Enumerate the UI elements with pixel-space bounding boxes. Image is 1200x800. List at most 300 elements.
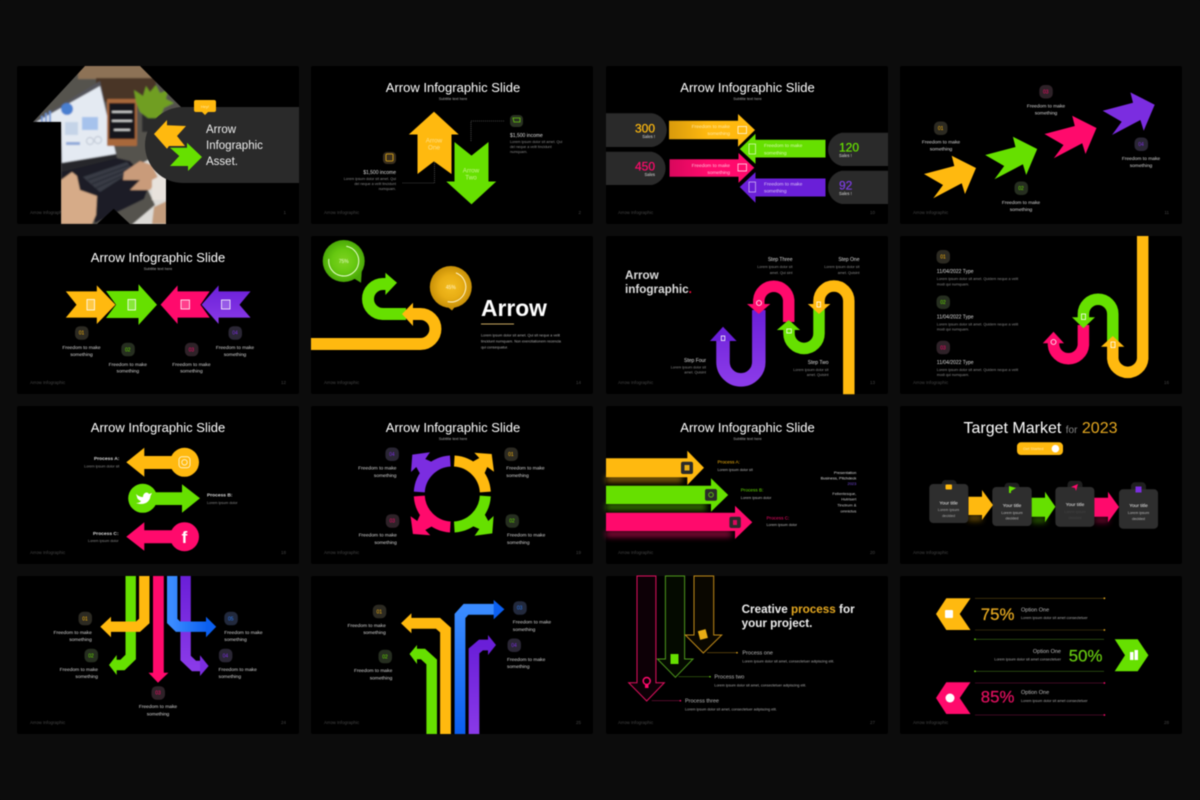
icons (643, 629, 708, 688)
panel: slide 13 branching arrows down (30, 576, 286, 725)
arrow captions: something (764, 188, 787, 194)
yellow percent bubble (430, 266, 472, 310)
footer: Arrow Infographic (913, 380, 949, 385)
step 05: 05 (228, 616, 234, 622)
footer label: Arrow Infographic (30, 210, 66, 215)
heading: Arrow (625, 269, 660, 282)
cover title: Infographic (206, 140, 263, 152)
card 3: decided (1069, 516, 1081, 520)
arrow labels: Arrow (426, 138, 443, 144)
step 05 (224, 612, 263, 643)
step 04: Freedom to make (507, 657, 546, 663)
step 02: Freedom to make (109, 362, 147, 368)
icons (738, 126, 756, 192)
step two (793, 360, 829, 377)
step 03: Freedom to make (139, 704, 177, 710)
85 percent (981, 688, 1088, 707)
right pills (828, 133, 888, 204)
side text: Tinctrum & (837, 502, 857, 508)
process B label: Lorem ipsum dolor (207, 501, 238, 505)
card 2 (992, 483, 1032, 526)
arrow captions: something (707, 170, 730, 176)
step 02: something (370, 676, 393, 682)
step 01: Freedom to make (347, 623, 386, 629)
subtitle: Subtitle text here (439, 97, 467, 101)
panel: slide 6 curved arrows (311, 240, 581, 385)
step 03: something (374, 540, 397, 546)
heading: Arrow Infographic Slide (680, 80, 815, 95)
75 percent: Option One (1021, 608, 1049, 614)
step 03: something (513, 627, 536, 633)
arrow captions: something (764, 150, 787, 156)
step 01: Freedom to make (53, 630, 92, 636)
panel: slide 4 rising arrows (913, 85, 1169, 215)
item 01 (936, 250, 1018, 286)
arrow labels: Arrow (463, 168, 480, 174)
sales labels (642, 134, 852, 196)
income text right: numquam. (510, 150, 527, 154)
step 04: 04 (389, 452, 395, 458)
footer: Arrow Infographic (913, 210, 949, 215)
step 04 (507, 638, 546, 670)
heading: infographic. (625, 283, 692, 296)
step 03: 03 (517, 606, 523, 612)
sales labels: Sales ! (839, 153, 852, 158)
step 02: something (75, 674, 98, 680)
process one (742, 651, 834, 663)
icon: green arrow (170, 143, 202, 171)
card 2: decided (1006, 516, 1018, 520)
step 04: 04 (1138, 142, 1144, 148)
icons (87, 300, 230, 310)
step 02: something (507, 540, 530, 546)
yellow arrow (968, 490, 993, 520)
icon: cart (510, 115, 523, 127)
card 4 (1119, 482, 1158, 529)
panel: slide 3 sales arrows (606, 80, 888, 215)
step one: Lorem ipsum dolor sit (824, 265, 860, 269)
pink arrow (1094, 492, 1119, 522)
arrow labels (426, 138, 480, 182)
item 03 (936, 341, 1018, 377)
card 1: decided (942, 514, 955, 518)
connectors (652, 652, 738, 702)
step four (671, 358, 706, 374)
yellow path (819, 286, 849, 394)
item 03: Lorem ipsum dolor sit amet. Quidem neque a velit (937, 368, 1018, 372)
purple path (710, 310, 759, 380)
green arrow (410, 645, 432, 734)
step 04 (358, 448, 399, 479)
sales labels: Sales ! (839, 191, 852, 196)
arrow captions: Freedom to make (692, 163, 730, 169)
process C label (88, 531, 119, 543)
icon boxes (681, 462, 741, 528)
yellow arrow (669, 114, 755, 147)
step 03: something (180, 368, 203, 374)
item 02: 02 (940, 300, 946, 306)
income text left: $1,500 income (363, 170, 396, 176)
instagram arrow (126, 448, 199, 477)
item 02: Lorem ipsum dolor sit amet. Quidem neque a velit (937, 322, 1018, 326)
process two (714, 675, 806, 687)
arrow labels: One (428, 144, 440, 152)
step three: Step Three (768, 257, 793, 263)
step 03: Freedom to make (1027, 104, 1065, 110)
yellow curved arrow (311, 303, 435, 344)
page number: 10 (870, 210, 875, 215)
purple arrow (474, 635, 496, 734)
step 03 (359, 514, 399, 546)
step 01: something (70, 352, 93, 358)
page number: 19 (576, 550, 581, 555)
step four: amet. Quisint (684, 370, 706, 374)
process A: Lorem ipsum dolor sit (718, 468, 753, 472)
footer: Arrow Infographic (324, 720, 360, 725)
item 03: 11/04/2022 Type (937, 360, 974, 366)
green quadrant (454, 496, 494, 536)
figures (635, 122, 859, 192)
arrow captions: Freedom to make (692, 124, 730, 130)
yellow percent bubble: 45% (446, 285, 456, 291)
arrow captions (692, 124, 803, 194)
step 04: something (224, 352, 247, 358)
yellow arrow (606, 451, 704, 485)
process two: Process two (714, 675, 744, 681)
heading: Arrow Infographic Slide (680, 420, 815, 435)
icon: yellow arrow (154, 120, 186, 149)
85 percent: 85% (981, 688, 1014, 707)
facebook arrow (126, 522, 199, 551)
card 4: Lorem ipsum (1128, 511, 1149, 515)
footer: Arrow Infographic (618, 210, 654, 215)
side text: Presentation (834, 470, 856, 475)
income text left: numquam. (379, 187, 396, 191)
step 04: something (218, 674, 241, 680)
step 03: 03 (390, 519, 395, 525)
yellow path (1101, 236, 1143, 372)
page number: 25 (576, 720, 581, 725)
step 03: 03 (1043, 90, 1049, 96)
subtitle: Subtitle text here (733, 437, 762, 441)
50 percent: 50% (1069, 647, 1102, 666)
arrow one (408, 111, 460, 175)
income text right: Lorem ipsum dolor sit amet. Qui (510, 140, 562, 144)
card 1: Your title (939, 500, 958, 506)
footer: Arrow Infographic (618, 380, 654, 385)
step 01 (504, 448, 545, 479)
step 02: 02 (88, 653, 94, 659)
page number: 13 (870, 380, 875, 385)
process A: Process A: (718, 460, 740, 464)
cover title (206, 124, 263, 168)
purple arrow (739, 171, 826, 204)
step 02: Freedom to make (507, 532, 546, 538)
twitter arrow (128, 484, 200, 513)
step 02: 02 (382, 654, 388, 660)
page number: 12 (281, 380, 286, 385)
green arrow (606, 478, 728, 512)
item 03: 03 (940, 345, 946, 351)
process B label (207, 492, 238, 505)
figures: 300 (635, 122, 655, 136)
pink path (1043, 325, 1083, 359)
step four: Lorem ipsum dolor sit (671, 366, 706, 370)
button (1017, 442, 1063, 455)
hey bubble (194, 100, 216, 115)
panel: slide 8 winding arrow list (913, 236, 1169, 385)
card 3 (1055, 481, 1094, 527)
green arrowhead (777, 320, 800, 330)
step three (757, 257, 793, 275)
figures: 120 (839, 140, 859, 154)
pink arrow (160, 284, 210, 325)
panel: slide 12 target market (913, 420, 1158, 555)
purple arrow (1103, 92, 1155, 135)
yellow branch (100, 576, 144, 637)
sales labels: Sales ! (642, 134, 655, 139)
green arrow (739, 133, 826, 165)
icons (721, 300, 820, 340)
pink banner (936, 682, 970, 714)
step 01: Freedom to make (922, 140, 960, 146)
yellow arrow (401, 613, 446, 734)
step 02: 02 (1018, 186, 1024, 192)
dashed connectors (402, 121, 504, 183)
green arrow (1032, 492, 1055, 522)
process A label (84, 456, 120, 468)
step 02 (506, 514, 546, 546)
page number: 28 (1164, 720, 1169, 725)
panel: slide 1 cover (28, 60, 299, 230)
50 percent: Lorem ipsum dolor sit amet consectetuer (994, 658, 1062, 662)
side text: Fellentesque, (832, 491, 856, 496)
footer: Arrow Infographic (324, 210, 360, 215)
income text right: del neque a velit tincidunt (510, 145, 552, 149)
step 02: Freedom to make (354, 668, 393, 674)
green branch (109, 576, 131, 675)
side text: 2023 (847, 481, 857, 486)
process C: Lorem ipsum dolor (766, 523, 798, 527)
page number: 18 (281, 550, 286, 555)
purple branch (186, 576, 209, 676)
process B: Lorem ipsum dolor (741, 496, 772, 500)
process A (718, 460, 753, 472)
process C: Process C: (766, 516, 789, 520)
sales labels: Sales (645, 172, 655, 177)
green curved arrow (368, 273, 406, 314)
process three: Process three (685, 699, 719, 705)
body text (481, 334, 562, 350)
lines (975, 598, 1104, 715)
heading: Creative process for (742, 603, 855, 616)
green outline arrow (657, 576, 693, 677)
step 01: 01 (938, 126, 944, 132)
yellow outline arrow (685, 576, 722, 653)
side text: Hutrisert (841, 496, 857, 502)
page number: 11 (1164, 210, 1169, 215)
step 04 (218, 649, 257, 680)
85 percent: Lorem ipsum dolor sit amet consectetuer (1021, 699, 1088, 703)
step 03 (513, 601, 551, 633)
step three: amet. Qui sint (770, 271, 792, 275)
footer: Arrow Infographic (30, 720, 66, 725)
step 03: Freedom to make (359, 532, 397, 538)
pink path (747, 286, 789, 322)
step 03 (172, 343, 211, 374)
side text (821, 470, 857, 514)
page number: 1 (283, 210, 286, 215)
step 03 (139, 686, 177, 718)
purple quadrant (411, 452, 450, 492)
step 04: Freedom to make (216, 345, 254, 351)
step 03: something (147, 712, 170, 718)
item 01: Lorem ipsum dolor sit amet. Quidem neque a velit (937, 277, 1018, 281)
heading: Arrow Infographic Slide (386, 420, 520, 435)
step 04: something (507, 664, 530, 670)
side text: Business, Pitchdeck (821, 476, 856, 480)
purple arrow (201, 284, 251, 325)
figures: 450 (635, 160, 655, 174)
step 01 (53, 612, 92, 643)
item 02: 11/04/2022 Type (937, 314, 974, 320)
item 01: modi qui numquam. (937, 282, 969, 286)
footer: Arrow Infographic (618, 720, 654, 725)
arrow labels: Two (465, 174, 477, 182)
facebook arrow: f (182, 528, 188, 547)
step one: Step One (838, 257, 860, 263)
panel: slide 2 two arrows (324, 80, 581, 215)
step 03: Freedom to make (513, 620, 551, 626)
green arrow (985, 137, 1037, 179)
income text left: del neque a velit tincidunt (354, 182, 396, 186)
yellow arrow (65, 284, 116, 325)
panel: slide 16 percent banners (913, 597, 1169, 725)
footer: Arrow Infographic (913, 720, 949, 725)
process two: Lorem ipsum dolor sit amet, consectetuer adipiscing elit. (714, 683, 806, 687)
panel: slide 7 winding arrow (618, 257, 875, 394)
panel: slide 11 horizontal arrows (606, 420, 875, 555)
income text left (344, 170, 396, 191)
step 02: something (1010, 207, 1033, 213)
step 01: something (506, 473, 529, 479)
pink quadrant (411, 496, 450, 535)
pink arrow (669, 152, 755, 184)
process C (766, 516, 798, 527)
page number: 2 (578, 210, 581, 215)
step 04: 04 (223, 653, 228, 659)
step 01 (347, 605, 386, 636)
card 2: Your title (1003, 503, 1022, 509)
step 04: 04 (232, 331, 238, 337)
step 04: 04 (511, 643, 517, 649)
icons (1051, 314, 1115, 348)
step 01 (62, 326, 101, 358)
step 01: 01 (508, 452, 514, 458)
banner icons (945, 610, 1138, 702)
arrow captions: something (707, 131, 730, 137)
green percent bubble (323, 240, 365, 283)
footer: Arrow Infographic (324, 550, 360, 555)
step 04: something (1130, 163, 1153, 169)
card 4: Your title (1129, 503, 1148, 509)
panel: slide 9 social arrows (30, 420, 286, 555)
step 04 (216, 326, 254, 358)
pink arrow (1044, 116, 1096, 158)
step 02 (60, 649, 98, 680)
footer: Arrow Infographic (618, 550, 654, 555)
page number: 16 (1164, 380, 1169, 385)
heading: Arrow Infographic Slide (91, 420, 225, 435)
panel: slide 10 arrow ring (324, 420, 581, 555)
step 04 (1122, 138, 1160, 169)
side text: omnictus (840, 508, 856, 514)
green percent bubble: 75% (339, 259, 349, 265)
photo arrow (33, 65, 181, 225)
process A label: Process A: (94, 456, 120, 462)
green arrow (106, 284, 157, 325)
step 02: Freedom to make (1002, 200, 1040, 206)
step two: Step Two (808, 360, 829, 366)
step 02: 02 (509, 519, 515, 525)
process one: Process one (742, 651, 773, 657)
card 3: Lorem ipsum (1064, 510, 1086, 514)
step 04: something (374, 473, 397, 479)
process B label: Process B: (207, 492, 233, 498)
yellow arrowhead (808, 304, 830, 314)
85 percent: Option One (1021, 690, 1049, 696)
body text: tincidunt numquam. Non exercitationem recencia (481, 340, 562, 344)
green path (777, 308, 819, 348)
step one: amet. Quisint (838, 271, 860, 275)
item 02: modi qui numquam. (937, 328, 969, 332)
card 2: Lorem ipsum (1001, 511, 1023, 515)
process C label: Process C: (93, 531, 119, 537)
step 01: Freedom to make (62, 345, 101, 351)
step three: Lorem ipsum dolor sit (757, 265, 792, 269)
footer: Arrow Infographic (324, 380, 360, 385)
step 01: 01 (79, 331, 84, 337)
green path (1072, 299, 1113, 345)
step 02: Freedom to make (60, 667, 98, 673)
pink branch (148, 576, 168, 683)
step 03 (1027, 85, 1065, 116)
green banner (1115, 639, 1148, 671)
step 01: 01 (82, 616, 88, 622)
step 02: something (117, 368, 139, 374)
page number: 27 (870, 720, 875, 725)
yellow arrow (924, 156, 976, 198)
card 1 (929, 480, 968, 523)
heading: Target Market for 2023 (964, 420, 1118, 437)
item 01: 01 (940, 254, 946, 260)
page number: 14 (576, 380, 581, 385)
blue branch (172, 576, 216, 637)
step two: amet. Quisint (807, 373, 828, 377)
page number: 24 (281, 720, 286, 725)
item 01: 11/04/2022 Type (937, 269, 974, 275)
cover title: Asset. (206, 156, 238, 168)
subtitle: Subtitle text here (733, 97, 762, 101)
footer: Arrow Infographic (30, 380, 66, 385)
card 3: Your title (1066, 502, 1085, 508)
income text left: Lorem ipsum dolor sit amet. Qui (344, 177, 396, 181)
arrow two (445, 141, 498, 205)
arrow captions: Freedom to make (764, 182, 803, 188)
75 percent: 75% (981, 605, 1014, 624)
step 01: Freedom to make (506, 466, 545, 472)
glows (968, 515, 1109, 523)
